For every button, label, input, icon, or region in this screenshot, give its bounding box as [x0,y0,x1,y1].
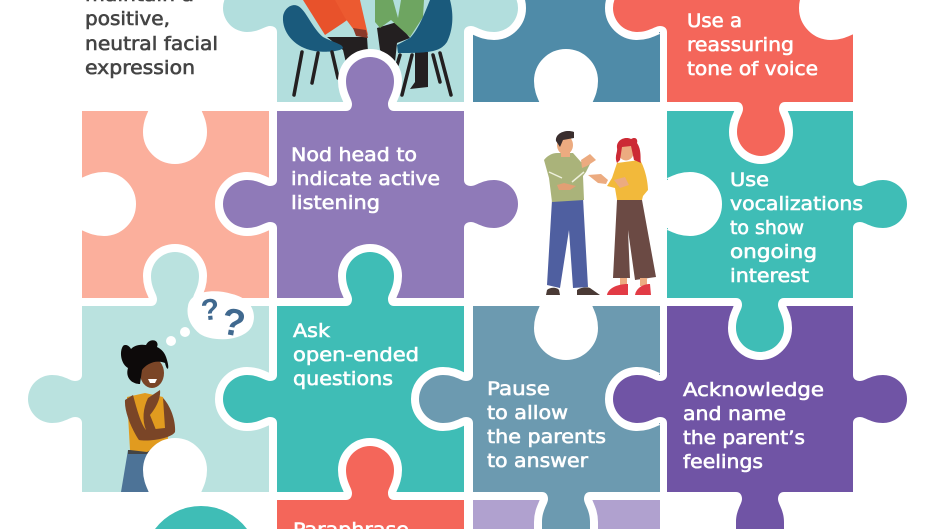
icon: thought bubble with question marks: ? [218,301,248,346]
illustration: two people seated on chairs [283,0,452,95]
text: positive facial expression: positive, [85,8,170,30]
text: acknowledge feelings: and name [683,403,786,425]
text: nod head: Nod head to [291,144,417,166]
text: open-ended questions: questions [293,368,393,390]
illustration: man and woman talking [544,131,656,295]
text: vocalizations: Use [730,169,769,191]
text: vocalizations: vocalizations [730,193,863,215]
text: acknowledge feelings: feelings [683,451,763,473]
text: pause: Pause [487,378,550,400]
text: reassuring tone: tone of voice [687,58,818,80]
text: open-ended questions: Ask [293,320,330,342]
text: acknowledge feelings: the parent’s [683,427,805,449]
text: reassuring tone: reassuring [687,34,794,56]
text: open-ended questions: open-ended [293,344,419,366]
text: acknowledge feelings: Acknowledge [683,379,824,401]
text: vocalizations [730,169,863,287]
text: pause: to allow [487,402,568,424]
text: vocalizations: to show [730,217,804,239]
text: reassuring tone [687,10,818,80]
text: pause [487,378,606,472]
text: positive facial expression [85,0,218,79]
text: nod head [291,144,440,214]
text: pause: to answer [487,450,588,472]
text: positive facial expression: expression [85,57,195,79]
icon: thought bubble with question marks [166,291,254,346]
icon: thought bubble with question marks: ? [199,293,221,328]
text: open-ended questions [293,320,419,390]
text: vocalizations: interest [730,265,809,287]
bottom-left teal circle [155,506,247,529]
illustration: thinking woman [121,340,175,492]
text: nod head: listening [291,192,380,214]
text: vocalizations: ongoing [730,241,817,263]
text: nod head: indicate active [291,168,440,190]
text: pause: the parents [487,426,606,448]
text: reassuring tone: Use a [687,10,742,32]
text: acknowledge feelings [683,379,824,473]
text: positive facial expression: neutral facial [85,33,218,55]
